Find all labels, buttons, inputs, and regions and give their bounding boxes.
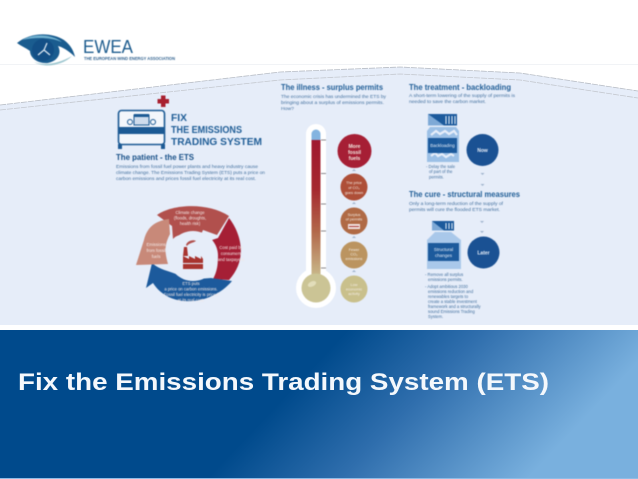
- text: structural notes: emissions reduction and: [428, 289, 474, 294]
- text: illness description: How?: [281, 106, 295, 111]
- text: illness description: The economic crisis has undermined the ETS by: [281, 94, 387, 99]
- heading: the cure: The cure - structural measures: [409, 189, 520, 199]
- icon: structural changes bottle: [427, 221, 461, 269]
- chart: thermometer: [296, 124, 336, 308]
- circle: low economic activity: [340, 276, 368, 302]
- text: patient description: climate change. The Emissions Trading System (ETS) puts a price on: [116, 170, 266, 175]
- text: backloading notes: permits.: [429, 174, 444, 180]
- panel: the illness: [281, 82, 387, 308]
- labels: cycle segments: at its real cost.: [178, 298, 204, 302]
- title: Fix the Emissions Trading System (ETS): [18, 369, 549, 396]
- infographic background panel: [0, 67, 638, 325]
- text: treatment description: A short-term lowering of the supply of permits is: [409, 93, 516, 98]
- label: structural changes: Structural: [434, 247, 453, 252]
- labels: cycle segments: ETS puts: [182, 281, 200, 286]
- arrows: treatment to cure: [480, 173, 484, 186]
- icon: red cross: [158, 96, 169, 107]
- circle: fewer emissions: Fewer: [349, 248, 360, 252]
- circles: causes chain: [338, 134, 372, 302]
- text: structural notes: - Remove all surplus: [425, 272, 463, 277]
- heading: the illness: The illness - surplus permits: [281, 82, 383, 92]
- segment: climate change: [157, 206, 229, 239]
- text: patient description: [116, 164, 266, 181]
- label: structural changes: [434, 247, 453, 258]
- icon: factory: [183, 240, 203, 269]
- labels: cycle segments: Climate change: [175, 210, 205, 215]
- icon: eye with turbine: [17, 34, 75, 65]
- circle: price falls: The price: [346, 181, 362, 185]
- segment: ETS puts a price: [146, 263, 232, 301]
- heading: the patient: The patient - the ETS: [116, 152, 194, 162]
- circle: surplus of permits: [340, 208, 368, 234]
- labels: cycle segments: and taxpayers: [218, 257, 244, 262]
- circle: fewer emissions: [340, 242, 368, 268]
- arrows: cure to later: [480, 221, 484, 233]
- circle: fewer emissions: emissions: [346, 257, 363, 261]
- text: structural notes: create a stable investment: [428, 299, 478, 304]
- circle: later: Later: [477, 250, 490, 256]
- segment: cost paid: [212, 218, 241, 280]
- text: structural notes: emissions permits.: [428, 277, 463, 282]
- panel: the patient: [116, 96, 266, 302]
- header rule: [0, 64, 638, 65]
- labels: cycle segments: Emissions: [146, 242, 166, 247]
- circle: price falls: goes down: [345, 191, 363, 195]
- text: cure description: permits will cure the flooded ETS market.: [409, 207, 500, 212]
- text: backloading notes: [426, 164, 456, 180]
- logo tagline: THE EUROPEAN WIND ENERGY ASSOCIATION: [84, 56, 175, 61]
- text: structural notes: - Adopt ambitious 2030: [425, 284, 469, 289]
- labels: cycle segments: consumers: [221, 251, 241, 256]
- circle: now: [466, 134, 498, 166]
- circle: more fossil fuels: fossil: [348, 150, 362, 156]
- circle: more fossil fuels: [338, 134, 372, 168]
- circle: more fossil fuels: fuels: [349, 156, 361, 162]
- circle: surplus of permits: of permits: [346, 218, 362, 222]
- text: cure description: [409, 201, 504, 212]
- logo: EWEA: [17, 34, 175, 65]
- labels: cycle segments: health risk): [180, 221, 201, 226]
- heading: fix the emissions trading system: THE EMISSIONS: [171, 125, 242, 136]
- labels: cycle segments: a price on carbon emissions.: [164, 286, 218, 292]
- chart: emissions cycle: [136, 206, 244, 302]
- icon: hospital bed: [118, 110, 165, 149]
- label: backloading: Backloading: [430, 143, 455, 148]
- text: structural notes: renewables targets to: [428, 294, 469, 299]
- heading: fix the emissions trading system: TRADING SYSTEM: [171, 137, 262, 148]
- panel: treatment and cure: [409, 82, 520, 319]
- heading: the treatment: The treatment - backloading: [409, 82, 511, 92]
- text: backloading notes: of part of the: [429, 169, 453, 174]
- circle: low economic activity: economic: [346, 288, 362, 292]
- text: structural notes: System.: [428, 314, 443, 319]
- text: treatment description: needed to save the carbon market.: [409, 99, 486, 104]
- circle: later: [468, 236, 500, 268]
- text: treatment description: [409, 93, 516, 104]
- text: cure description: Only a long-term reduction of the supply of: [409, 201, 504, 206]
- logo wordmark: EWEA: [83, 36, 134, 57]
- labels: cycle segments: fuels: [152, 254, 160, 259]
- text: illness description: [281, 94, 387, 111]
- text: structural notes: [425, 272, 482, 319]
- text: illness description: bringing about a surplus of emissions permits.: [281, 100, 384, 105]
- circle: price falls: of CO₂: [348, 186, 360, 190]
- circle: now: Now: [477, 148, 488, 154]
- circle: low economic activity: activity: [348, 292, 360, 296]
- text: patient description: Emissions from fossil fuel power plants and heavy industry cause: [116, 164, 259, 169]
- text: backloading notes: - Delay the sale: [426, 164, 456, 169]
- heading: fix the emissions trading system: FIX: [171, 113, 187, 124]
- icon: backloading bottle: [427, 114, 459, 162]
- circle: low economic activity: Low: [351, 283, 358, 287]
- labels: cycle segments: Cost paid by: [219, 245, 244, 250]
- text: structural notes: framework and a structurally: [428, 304, 482, 309]
- labels: cycle segments: from fossil: [146, 248, 166, 253]
- labels: cycle segments: (floods, droughts,: [174, 216, 206, 220]
- text: structural notes: sound Emissions Trading: [428, 309, 475, 314]
- circle: more fossil fuels: More: [349, 144, 361, 150]
- circle: surplus of permits: Surplus: [348, 213, 361, 217]
- labels: cycle segments: Fossil fuel electricity is priced: [164, 292, 219, 297]
- label: structural changes: changes: [435, 253, 453, 258]
- text: patient description: carbon emissions and prices fossil fuel electricity at its real cost.: [116, 176, 256, 181]
- circle: fewer emissions: CO₂: [350, 252, 358, 256]
- segment: emissions from fossil fuels: [136, 219, 170, 265]
- labels: cycle segments: [146, 210, 244, 302]
- arrows between circles: [352, 169, 356, 272]
- circle: price falls: [340, 174, 368, 200]
- heading: fix the emissions trading system: [171, 113, 262, 148]
